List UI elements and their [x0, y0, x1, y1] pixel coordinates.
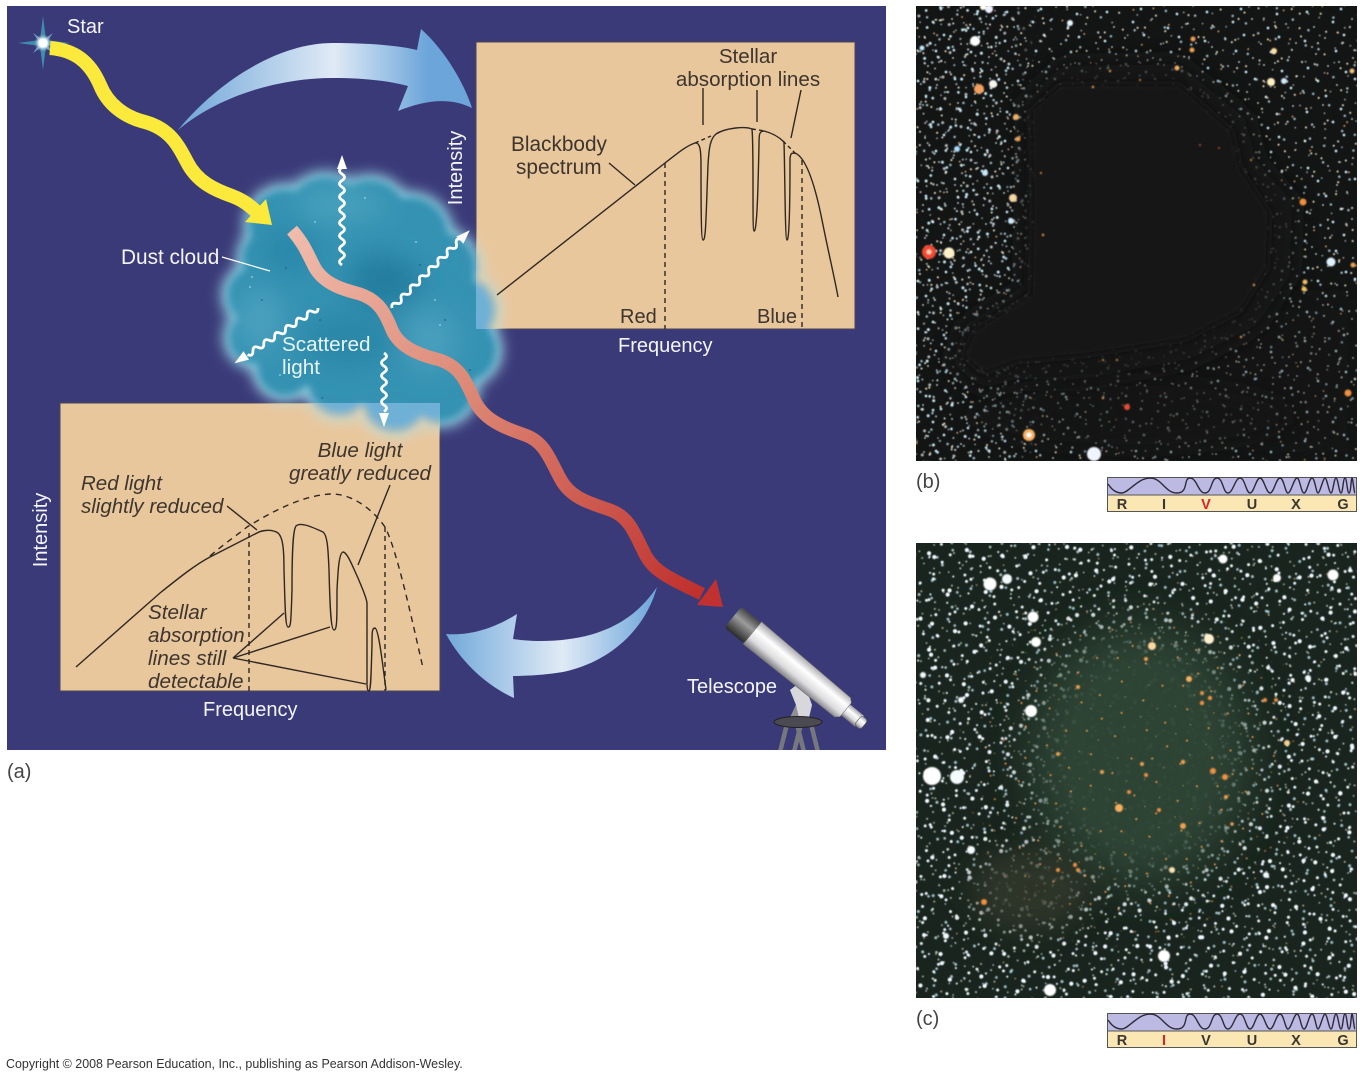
label: Frequency bottom: Frequency — [203, 699, 298, 721]
label: Dust cloud — [121, 246, 270, 271]
spectrum bar b: X — [1291, 497, 1301, 513]
spectrum bar b: R — [1117, 497, 1128, 513]
photo b: dark cloud in visible light — [916, 4, 1357, 461]
dashed guide: red limit — [664, 163, 666, 329]
icon: star — [18, 16, 70, 70]
arrow: reddening light beam — [292, 230, 723, 607]
label: Stellar absorption lines: absorption lines — [676, 68, 820, 91]
spectrum bar b — [1108, 478, 1356, 513]
icon: telescope — [724, 606, 873, 752]
label: Telescope: Telescope — [687, 676, 777, 698]
dashed guide: blue limit — [801, 160, 803, 329]
caption: (b): (b) — [916, 471, 940, 493]
arrow: curved blue bottom — [446, 587, 657, 698]
arrow: scattered light right — [388, 227, 473, 312]
spectrum bar c: R — [1117, 1033, 1128, 1049]
label: Frequency top: Frequency — [618, 335, 712, 357]
label: Red light slightly reduced: slightly reduced — [81, 495, 224, 518]
label: Red: Red — [620, 306, 657, 328]
spectrum bar b: U — [1247, 497, 1257, 513]
spectrum bar b: G — [1337, 497, 1349, 513]
spectrum bar c: V — [1201, 1033, 1211, 1049]
label: Stellar absorption lines still detectable: absorption — [148, 624, 245, 647]
label: Stellar absorption lines still detectable: lines still — [148, 647, 228, 670]
label: Scattered light: Scattered — [282, 333, 371, 356]
label: Stellar absorption lines still detectable: detectable — [148, 670, 243, 693]
label: Blue light greatly reduced: Blue light — [318, 439, 404, 462]
spectrum bar c: X — [1291, 1033, 1301, 1049]
photo c: dark cloud in infrared light — [916, 543, 1357, 998]
arrow: scattered light down — [379, 353, 389, 427]
panel a: diagram background — [7, 6, 886, 750]
chart: top spectrum — [497, 88, 838, 329]
leader lines — [227, 485, 390, 684]
label: Stellar absorption lines: Stellar — [719, 45, 777, 68]
caption: (a): (a) — [7, 761, 31, 783]
label: Blackbody spectrum: spectrum — [516, 156, 602, 179]
spectrum bar c: I — [1162, 1033, 1166, 1049]
arrow: scattered light up — [337, 155, 347, 265]
copyright line: Copyright © 2008 Pearson Education, Inc., publishing as Pearson Addison-Wesley. — [6, 1057, 463, 1071]
arrow: curved blue top — [178, 29, 472, 130]
arrow: scattered light left — [232, 304, 321, 367]
label: Dust cloud: Dust cloud — [121, 246, 219, 269]
spectrum bar c: U — [1247, 1033, 1257, 1049]
dashed guide: blue limit — [384, 527, 386, 691]
label: Blackbody spectrum: Blackbody — [511, 133, 608, 156]
label: Stellar absorption lines still detectable: Stellar — [148, 601, 208, 624]
arrow: yellow starlight — [50, 48, 272, 225]
spectrum bar c — [1108, 1014, 1356, 1049]
caption: (c): (c) — [916, 1008, 939, 1030]
label: Red light slightly reduced: Red light — [81, 472, 163, 495]
label: Intensity bottom: Intensity — [30, 493, 52, 567]
label: Blue light greatly reduced: greatly reduced — [289, 462, 432, 485]
chart: bottom spectrum — [76, 485, 423, 691]
spectrum bar b: I — [1162, 497, 1166, 513]
panel: top spectrum background — [476, 42, 855, 329]
leader lines — [609, 88, 801, 185]
dashed guide: red limit — [248, 533, 250, 691]
spectrum bar c: G — [1337, 1033, 1349, 1049]
spectrum bar b: V — [1201, 497, 1211, 513]
label: Intensity top: Intensity — [445, 131, 467, 205]
cloud overlap on spectrum panels — [260, 232, 508, 438]
dust cloud — [227, 177, 497, 430]
label: Scattered light: light — [282, 356, 320, 379]
label: Star: Star — [67, 16, 104, 38]
label: Blue: Blue — [757, 306, 797, 328]
panel: bottom spectrum background — [60, 403, 440, 691]
